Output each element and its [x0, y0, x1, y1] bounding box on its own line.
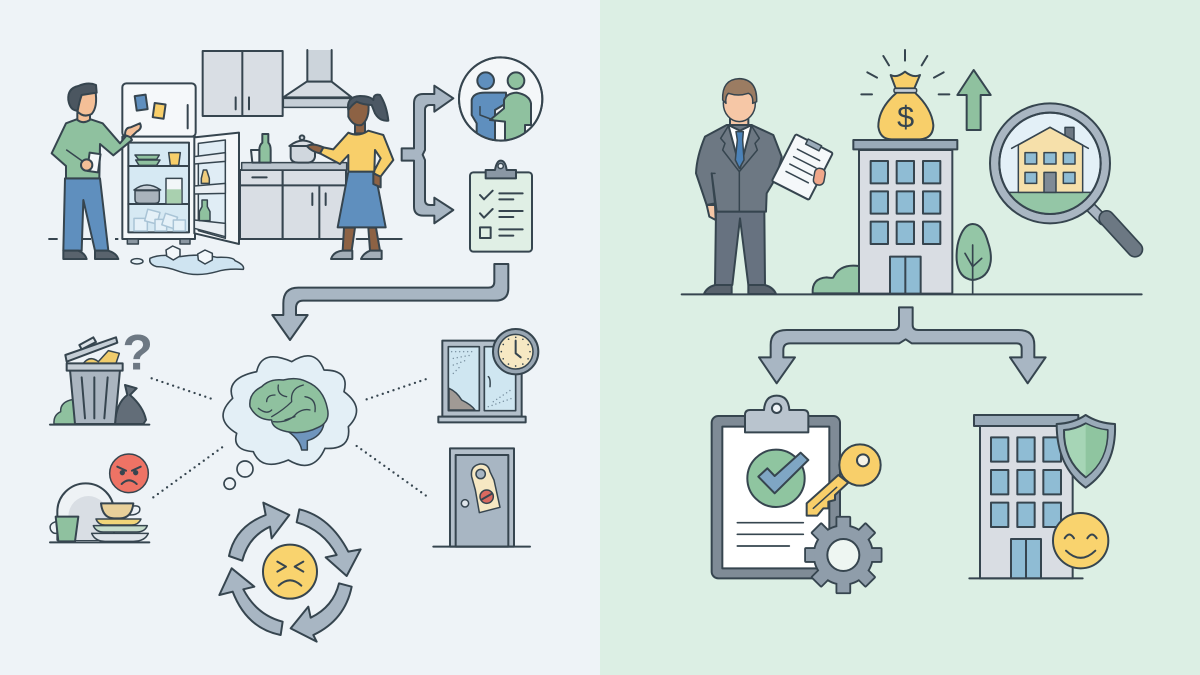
icon: tree — [957, 224, 991, 293]
panel: management outcomes — [712, 307, 1115, 592]
cooking pot — [289, 135, 316, 163]
clipboard in hand — [772, 133, 833, 200]
icon: checklist clipboard — [470, 161, 532, 252]
icon: two people shaking hands — [459, 57, 542, 143]
well-managed building — [969, 415, 1083, 578]
sparkle rays — [861, 50, 949, 94]
water puddle with ice — [131, 246, 244, 274]
floor line — [48, 236, 402, 242]
icon: up arrow — [957, 70, 991, 130]
wall cabinets — [203, 51, 283, 116]
man in green sweater — [52, 84, 141, 259]
icon: magnifying glass over house — [990, 103, 1135, 249]
icon: bush — [813, 266, 859, 293]
panel: right background — [600, 0, 1200, 675]
ground line — [682, 291, 1142, 297]
panel: property manager and investment — [682, 50, 1142, 294]
icon: shield — [1057, 415, 1115, 488]
icon: angry red face — [110, 454, 148, 493]
thought cloud with brain — [223, 356, 357, 489]
icon: dirty window with clock — [438, 329, 538, 422]
arrow down to thought cloud — [272, 264, 508, 340]
counter bottle and glass — [251, 134, 271, 163]
icon: stack of dirty dishes — [50, 483, 149, 542]
office building — [853, 140, 957, 294]
icon: brain — [250, 379, 328, 450]
woman in yellow top — [307, 95, 393, 259]
icon: money bag — [878, 72, 933, 139]
fridge — [122, 83, 239, 244]
icon: recurring frustration cycle arrows — [219, 503, 361, 642]
panel: mental load causes — [50, 324, 538, 642]
icon: gear — [806, 518, 881, 592]
icon: key — [807, 444, 881, 516]
property manager figure — [696, 79, 833, 294]
icon: overflowing trash can — [50, 337, 149, 425]
icon: annoyed yellow face — [263, 545, 317, 599]
icon: approved document clipboard — [712, 396, 881, 592]
fridge door — [194, 133, 239, 244]
panel: left background — [0, 0, 600, 675]
branching bracket arrow — [402, 86, 453, 223]
panel: kitchen problem scene — [48, 50, 542, 340]
dotted connector lines — [152, 378, 428, 497]
base cabinets and counter — [240, 163, 347, 239]
range hood — [283, 50, 352, 107]
icon: question mark: ? — [122, 324, 153, 380]
icon: money bag: $ — [897, 100, 914, 134]
icon: door with do-not-disturb hanger — [433, 448, 530, 547]
split arrow — [759, 307, 1046, 383]
icon: smiling face — [1053, 513, 1108, 568]
